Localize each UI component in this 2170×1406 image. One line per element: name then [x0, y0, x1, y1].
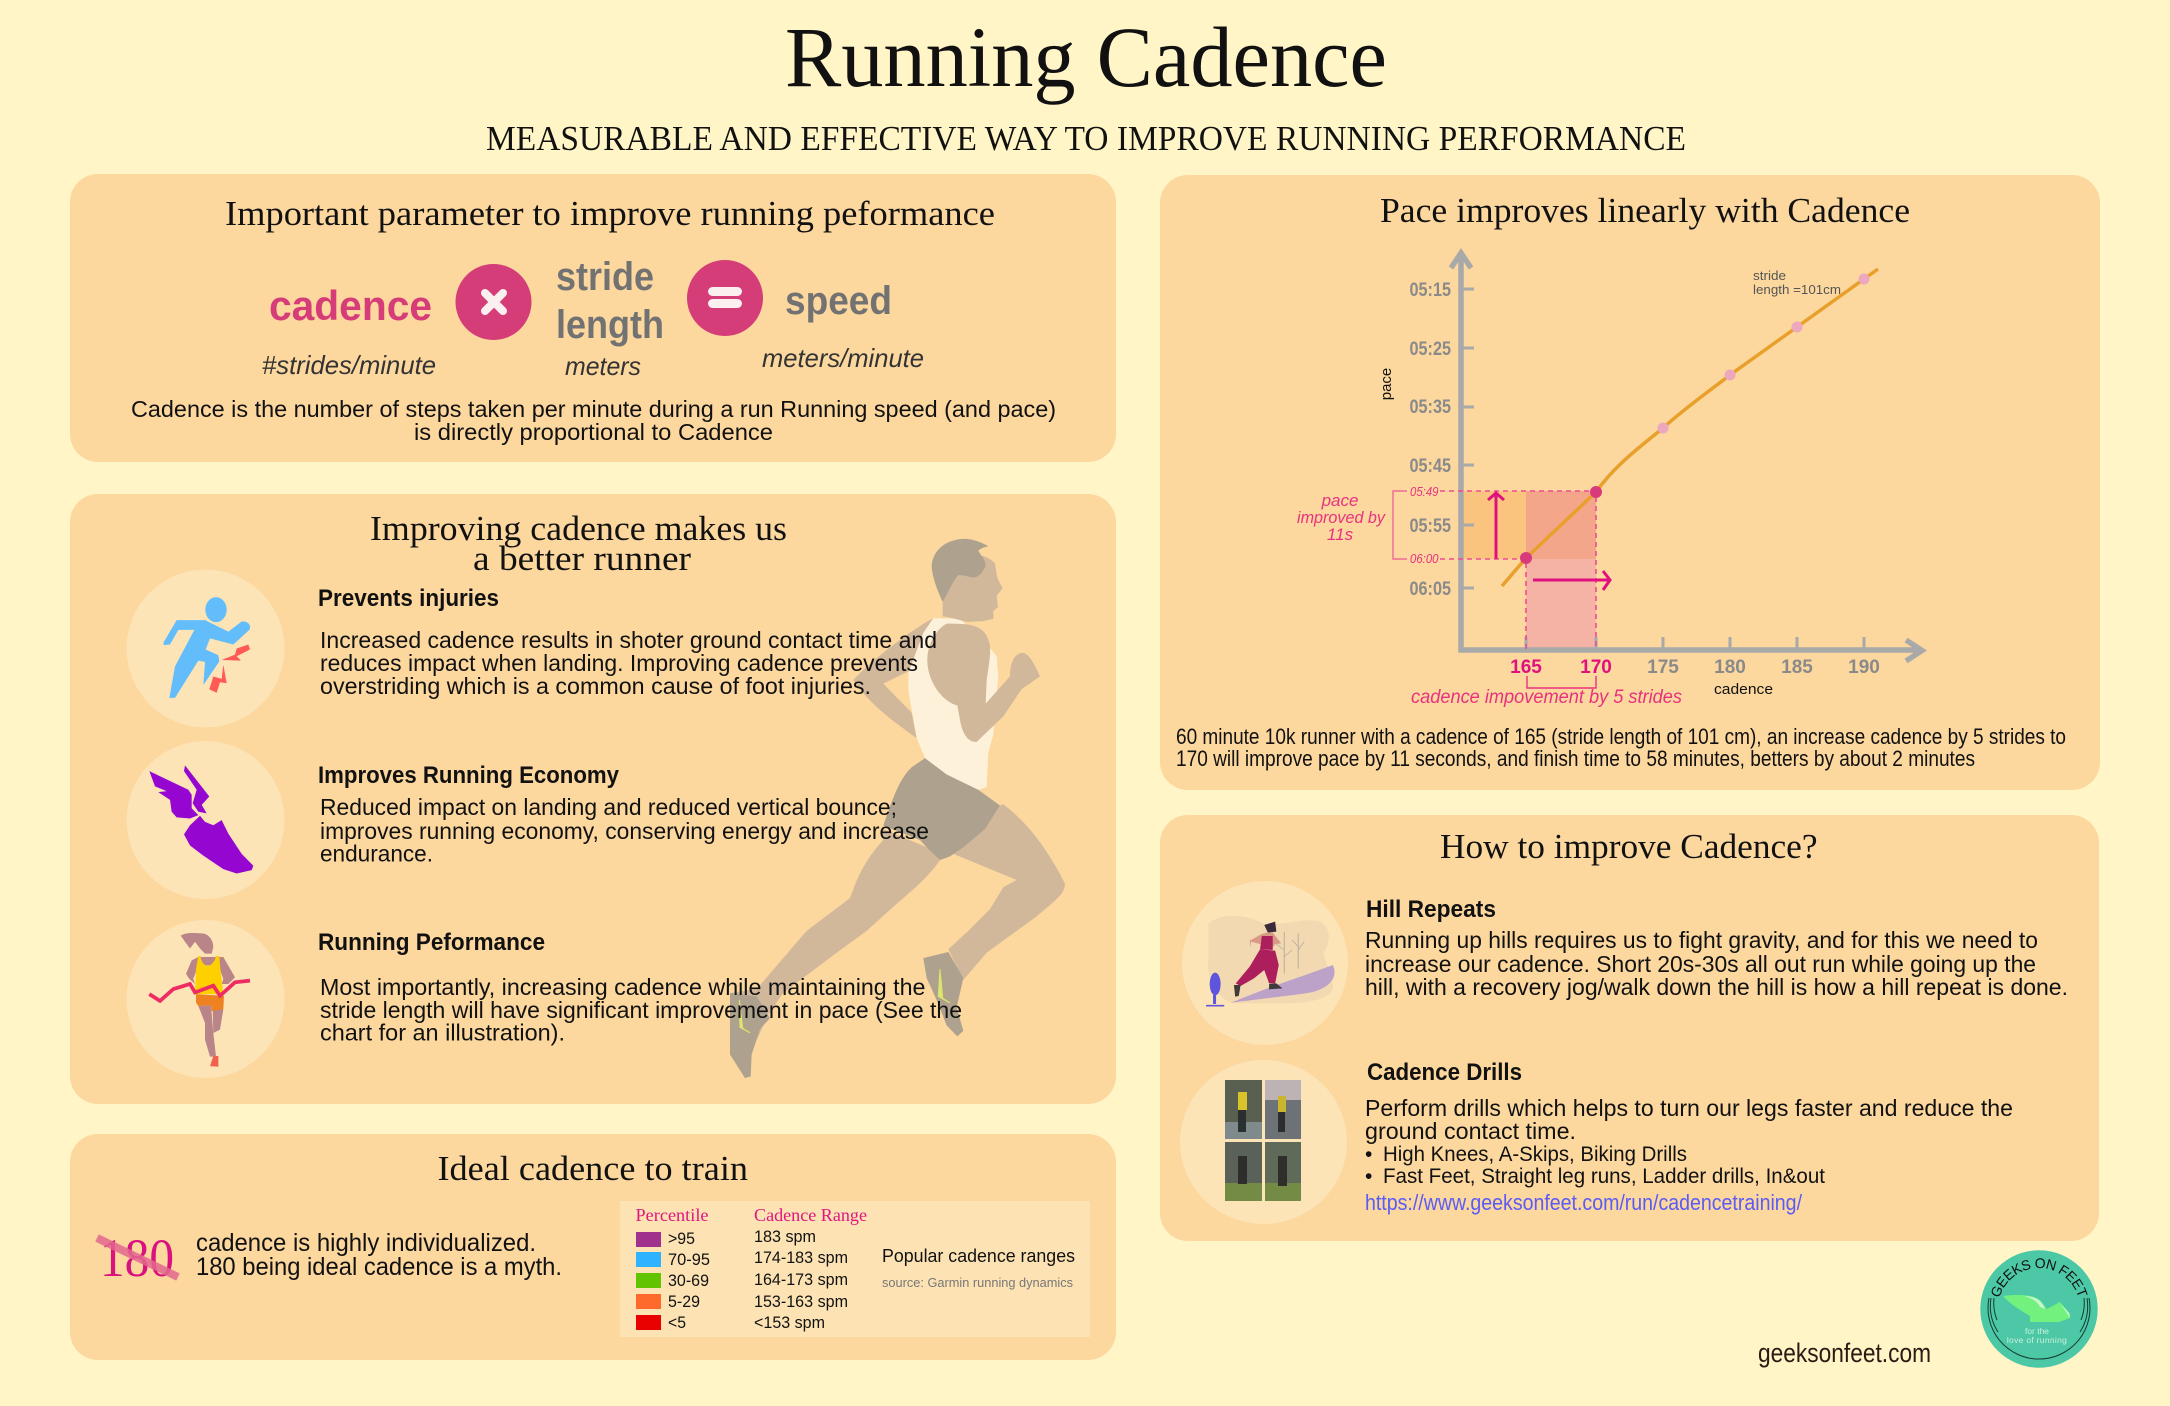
- text: cadence drills: ground contact time.: [1365, 1118, 1576, 1144]
- table: popular cadence ranges: <153 spm: [754, 1313, 825, 1332]
- text: cadence drills: High Knees, A-Skips, Biking Drills: [1383, 1143, 1687, 1166]
- line chart: pace vs cadence: 05:45: [1410, 456, 1451, 477]
- text: cadence drills: •: [1365, 1143, 1372, 1166]
- table: popular cadence ranges: 153-163 spm: [754, 1292, 848, 1311]
- text: running performance: Most importantly, increasing cadence while maintaining the: [320, 974, 926, 1000]
- text: cadence myth: [196, 1229, 562, 1281]
- text: prevents injuries: Prevents injuries: [318, 585, 499, 612]
- icon: finishing runner: [126, 920, 284, 1078]
- subtitle: MEASURABLE AND EFFECTIVE WAY TO IMPROVE RUNNING PERFORMANCE: [486, 119, 1686, 158]
- table: popular cadence ranges: source: Garmin running dynamics: [882, 1275, 1073, 1290]
- line chart: pace vs cadence: improved by: [1297, 508, 1386, 527]
- line chart: pace vs cadence: length =101cm: [1753, 282, 1841, 297]
- line chart: pace vs cadence: 05:15: [1410, 280, 1451, 301]
- text: running performance: stride length will have significant improvement in pace (See the: [320, 997, 962, 1023]
- text: chart explanation: [1176, 724, 2066, 771]
- line chart: pace vs cadence: 05:25: [1410, 339, 1451, 360]
- line chart: pace vs cadence: 175: [1647, 657, 1679, 678]
- icon: drill photos: [1180, 1060, 1347, 1224]
- table: popular cadence ranges: Percentile: [636, 1205, 709, 1225]
- logo: geeks on feet: love of running: [2007, 1335, 2067, 1345]
- table: popular cadence ranges: Popular cadence ranges: [882, 1246, 1075, 1266]
- text: cadence myth: 180 being ideal cadence is a myth.: [196, 1253, 562, 1281]
- icon: injured runner: [126, 570, 284, 728]
- unit: meters: meters: [565, 351, 641, 381]
- text: prevents injuries: reduces impact when landing. Improving cadence prevents: [320, 650, 918, 676]
- text: cadence drills: Fast Feet, Straight leg runs, Ladder drills, In&out: [1383, 1165, 1825, 1188]
- text: hill repeats: hill, with a recovery jog/walk down the hill is how a hill repeat is done.: [1365, 974, 2068, 1000]
- line chart: pace vs cadence: 05:49: [1410, 484, 1438, 499]
- heading: important parameter: Important parameter to improve running peformance: [225, 194, 995, 233]
- text: hill repeats: increase our cadence. Short 20s-30s all out run while going up the: [1365, 951, 2036, 977]
- table: popular cadence ranges: 30-69: [668, 1271, 709, 1290]
- line chart: pace vs cadence: stride: [1753, 268, 1786, 283]
- website label: geeksonfeet.com: [1758, 1338, 1931, 1368]
- crossed out 180: 180: [100, 1228, 174, 1288]
- icon: hill running illustration: [1182, 881, 1348, 1045]
- text: cadence drills: [1365, 1059, 2013, 1188]
- text: chart explanation: 170 will improve pace by 11 seconds, and finish time to 58 minutes, betters by about 2 minutes: [1176, 746, 1975, 771]
- icon: multiply: [456, 264, 532, 340]
- text: cadence drills: •: [1365, 1165, 1372, 1188]
- panel: improving cadence: [70, 494, 1116, 1104]
- cadence definition text: is directly proportional to Cadence: [414, 419, 773, 445]
- formula term: speed: speed: [785, 279, 892, 323]
- line chart: pace vs cadence: 190: [1848, 657, 1880, 678]
- text: prevents injuries: overstriding which is a common cause of foot injuries.: [320, 673, 871, 699]
- text: running performance: [318, 929, 962, 1046]
- text: prevents injuries: Increased cadence results in shoter ground contact time and: [320, 627, 937, 653]
- panel: important parameter: [70, 174, 1116, 462]
- heading: improving cadence: a better runner: [473, 539, 691, 578]
- table: popular cadence ranges: 164-173 spm: [754, 1270, 848, 1289]
- icon: winged shoe: [126, 741, 284, 899]
- formula term: stride length: stride: [556, 255, 654, 299]
- heading: how to improve: How to improve Cadence?: [1440, 827, 1818, 866]
- line chart: pace vs cadence: 06:00: [1410, 551, 1439, 566]
- line chart: pace vs cadence: cadence impovement by 5 strides: [1411, 687, 1682, 708]
- formula term: stride length: [556, 255, 664, 347]
- line chart: pace vs cadence: pace: [1321, 491, 1358, 510]
- table: popular cadence ranges: [620, 1201, 1090, 1337]
- table: popular cadence ranges: 5-29: [668, 1292, 700, 1311]
- heading: ideal cadence: Ideal cadence to train: [438, 1149, 748, 1188]
- text: hill repeats: Running up hills requires us to fight gravity, and for this we need to: [1365, 927, 2038, 953]
- line chart: pace vs cadence: 165: [1510, 657, 1542, 678]
- text: hill repeats: Hill Repeats: [1366, 896, 1496, 923]
- text: improves running economy: Reduced impact on landing and reduced vertical bounce;: [320, 794, 897, 820]
- panel: ideal cadence: [70, 1134, 1116, 1360]
- cadence definition text: Cadence is the number of steps taken per minute during a run Running speed (and pace): [131, 396, 1056, 422]
- logo: geeks on feet: for the: [2025, 1326, 2049, 1336]
- cadence definition text: [131, 396, 1056, 445]
- line chart: pace vs cadence: 170: [1580, 657, 1612, 678]
- panel: how to improve cadence: [1160, 815, 2099, 1241]
- panel: pace vs cadence: [1160, 175, 2100, 790]
- text: improves running economy: Improves Running Economy: [318, 762, 620, 789]
- line chart: pace vs cadence: 185: [1781, 657, 1813, 678]
- title: Running Cadence: [785, 9, 1387, 105]
- logo: geeks on feet: [1980, 1250, 2098, 1368]
- text: prevents injuries: [318, 585, 937, 699]
- table: popular cadence ranges: >95: [668, 1229, 695, 1248]
- runner silhouette: [730, 539, 1065, 1078]
- text: hill repeats: [1365, 896, 2068, 1000]
- formula term: stride length: length: [556, 303, 664, 347]
- table: popular cadence ranges: 174-183 spm: [754, 1248, 848, 1267]
- table: popular cadence ranges: Cadence Range: [754, 1205, 867, 1225]
- icon: equals: [687, 260, 763, 336]
- text: cadence drills: Perform drills which helps to turn our legs faster and reduce the: [1365, 1095, 2013, 1121]
- line chart: pace vs cadence: [1297, 253, 1922, 708]
- table: popular cadence ranges: 183 spm: [754, 1227, 816, 1246]
- link: cadence training: https://www.geeksonfeet.com/run/cadencetraining/: [1365, 1190, 1803, 1215]
- table: popular cadence ranges: <5: [668, 1313, 686, 1332]
- text: cadence myth: cadence is highly individualized.: [196, 1229, 536, 1257]
- line chart: pace vs cadence: pace: [1378, 368, 1395, 400]
- text: running performance: Running Peformance: [318, 929, 545, 956]
- heading: improving cadence: Improving cadence makes us: [370, 509, 787, 548]
- unit: meters per minute: meters/minute: [762, 343, 924, 373]
- unit: strides per minute: #strides/minute: [262, 350, 436, 380]
- text: improves running economy: improves running economy, conserving energy and increase: [320, 818, 929, 844]
- text: cadence drills: Cadence Drills: [1367, 1059, 1522, 1086]
- line chart: pace vs cadence: cadence: [1714, 681, 1773, 698]
- line chart: pace vs cadence: 11s: [1327, 525, 1354, 544]
- line chart: pace vs cadence: 05:55: [1410, 516, 1451, 537]
- table: popular cadence ranges: 70-95: [668, 1250, 710, 1269]
- line chart: pace vs cadence: 180: [1714, 657, 1746, 678]
- heading: improving cadence: [370, 509, 787, 578]
- text: improves running economy: endurance.: [320, 840, 433, 866]
- formula term: cadence: cadence: [269, 282, 432, 329]
- line chart: pace vs cadence: 05:35: [1410, 397, 1451, 418]
- text: improves running economy: [318, 762, 929, 866]
- line chart: pace vs cadence: 06:05: [1410, 579, 1451, 600]
- heading: pace vs cadence: Pace improves linearly with Cadence: [1380, 191, 1910, 230]
- logo: geeks on feet: GEEKS ON FEET: [1992, 1258, 2088, 1296]
- text: running performance: chart for an illustration).: [320, 1020, 565, 1046]
